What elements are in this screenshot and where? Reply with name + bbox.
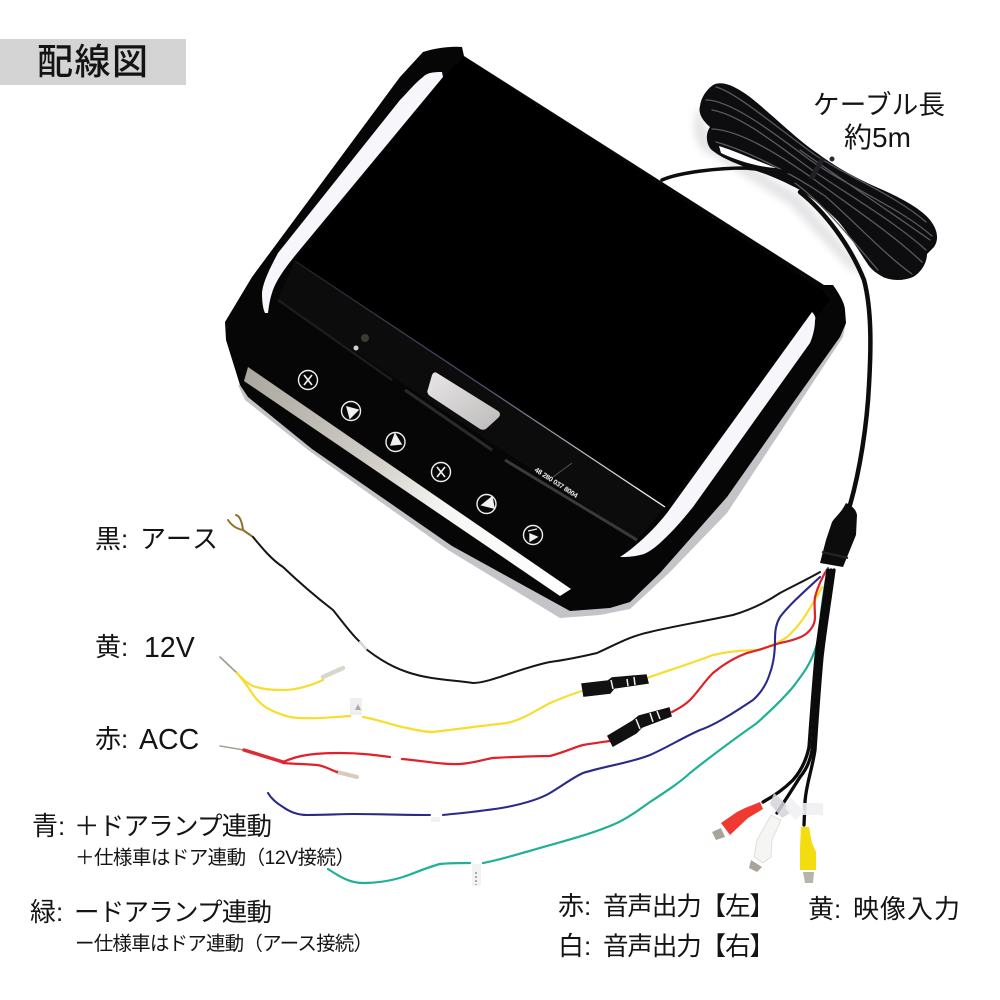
label: video input: 黄: [808, 894, 841, 924]
label: video input: 映像入力 [853, 894, 960, 924]
label: yellow 12V: 黄: [95, 632, 128, 662]
label: red ACC [95, 724, 199, 756]
cable to connector [662, 168, 870, 505]
label: cable length: ケーブル長 [813, 90, 945, 120]
label: audio output: 赤: [558, 891, 591, 921]
label: blue door lamp: 青: [32, 811, 65, 841]
label: audio output: 白: [558, 931, 591, 961]
RCA plug: yellow [800, 827, 816, 883]
label: green door lamp: ー仕様車はドア連動（アース接続） [75, 933, 373, 955]
wire: green door lamp minus [328, 568, 828, 883]
model markings: 48 280 037 8004 [533, 467, 579, 500]
wire: yellow 12V [220, 587, 822, 732]
label: blue door lamp: ＋仕様車はドア連動（12V接続） [75, 847, 355, 869]
title [0, 39, 186, 85]
fuse holder: yellow [582, 675, 648, 696]
label: red ACC: 赤: [95, 724, 128, 754]
label: black ground: 黒: [95, 524, 128, 554]
AV connector [820, 503, 857, 567]
monitor base edge [238, 323, 846, 618]
monitor [225, 47, 846, 618]
label: yellow 12V [95, 632, 195, 664]
label: green door lamp [30, 897, 373, 955]
title: 配線図 [37, 41, 148, 82]
label: blue door lamp: ＋ドアランプ連動 [74, 813, 272, 841]
label: red ACC: ACC [139, 724, 199, 756]
RCA cable bundle [763, 570, 834, 825]
label: cable length [813, 90, 945, 153]
fuse holder: red [608, 708, 671, 746]
wire: red ACC [220, 568, 828, 777]
monitor body [225, 47, 846, 611]
label: audio output: 音声出力【右】 [603, 933, 775, 961]
label: audio output: 音声出力【左】 [603, 893, 775, 921]
wire: black ground [228, 515, 820, 683]
wire clips [770, 793, 823, 820]
label: blue door lamp [32, 811, 355, 869]
label: green door lamp: ードアランプ連動 [74, 899, 272, 927]
label: yellow 12V: 12V [144, 632, 195, 664]
silver label [427, 372, 500, 430]
light bar: right [620, 312, 815, 557]
label: black ground: アース [140, 524, 218, 554]
light bar: bottom strip [244, 367, 571, 596]
RCA plug: red [712, 802, 763, 840]
label: cable length: 約5m [844, 122, 911, 153]
screen lid [295, 57, 830, 507]
wire: blue door lamp plus [268, 577, 820, 815]
label: audio output [558, 891, 775, 961]
control panel [278, 261, 665, 540]
touch buttons [298, 370, 542, 544]
RCA plug: white [749, 815, 781, 872]
wire tags [350, 698, 481, 886]
icon: coiled cable [694, 83, 937, 280]
camera [354, 334, 369, 350]
label: black ground [95, 524, 218, 554]
label: green door lamp: 緑: [30, 897, 63, 927]
light bar: left [262, 72, 443, 313]
